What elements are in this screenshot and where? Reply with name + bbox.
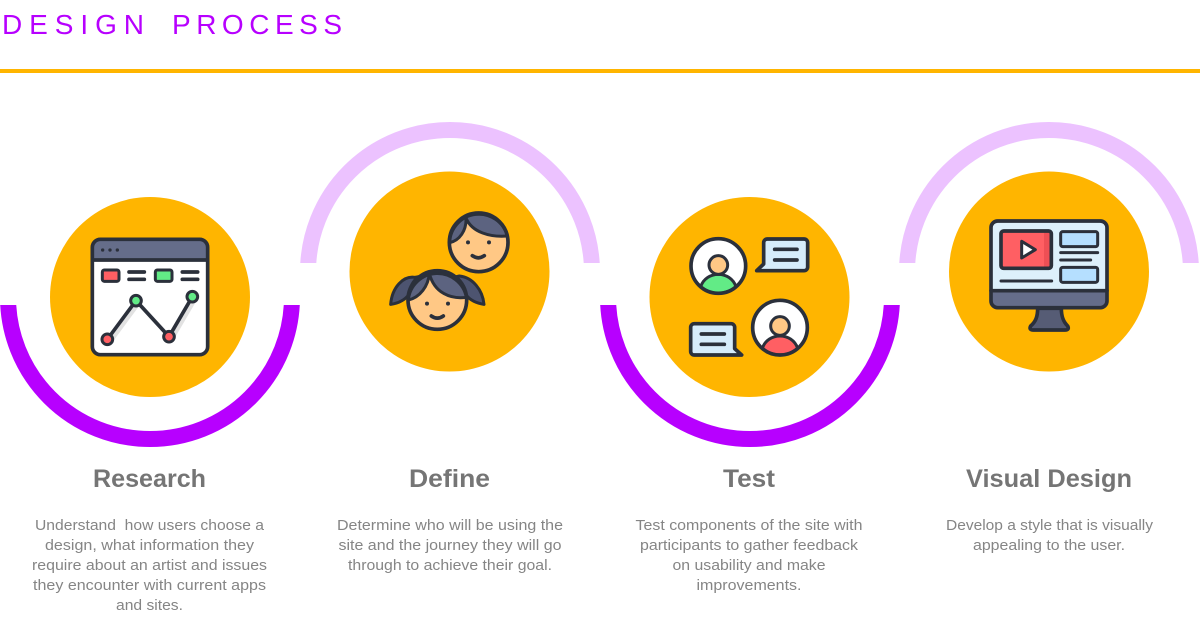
- text: define description: Determine who will be using the: [337, 517, 563, 534]
- text: define description: site and the journey they will go: [338, 537, 562, 554]
- text: test description: [636, 517, 862, 594]
- text: test description: on usability and make: [672, 557, 826, 574]
- text: test description: participants to gather feedback: [640, 537, 859, 554]
- title: [2, 9, 342, 40]
- orange circle: [650, 197, 850, 397]
- light purple top arc: [899, 122, 1199, 263]
- text: define description: [337, 517, 563, 574]
- orange circle: [949, 172, 1149, 372]
- text: test description: Test components of the site with: [636, 517, 862, 534]
- title: DESIGN: [2, 9, 144, 40]
- panel: research: [8, 155, 292, 614]
- text: visual design description: Develop a style that is visually: [946, 517, 1154, 534]
- text: visual design description: appealing to the user.: [973, 537, 1125, 554]
- text: research description: Understand how users choose a: [35, 517, 265, 534]
- heading: visual design: Visual Design: [966, 465, 1132, 493]
- icon: browser window with line chart: [92, 239, 208, 355]
- panel: define: [308, 130, 592, 574]
- icon: desktop monitor with video: [991, 221, 1107, 330]
- orange circle: [350, 172, 550, 372]
- title: PROCESS: [172, 9, 342, 40]
- text: research description: they encounter with current apps: [33, 577, 266, 594]
- purple bottom arc: [0, 305, 300, 447]
- text: define description: through to achieve their goal.: [348, 557, 552, 574]
- heading: research: Research: [93, 465, 206, 493]
- heading: define: Define: [409, 465, 490, 493]
- text: visual design description: [946, 517, 1154, 554]
- text: research description: [32, 517, 267, 614]
- text: test description: improvements.: [696, 577, 802, 594]
- light purple top arc: [300, 122, 600, 263]
- purple bottom arc: [600, 305, 900, 447]
- text: research description: design, what information they: [45, 537, 255, 554]
- icon: participants and speech bubbles: [691, 239, 808, 355]
- panel: visual design: [907, 130, 1191, 554]
- orange circle: [50, 197, 250, 397]
- text: research description: require about an artist and issues: [32, 557, 267, 574]
- icon: two children faces: [391, 213, 508, 329]
- heading: test: Test: [723, 465, 776, 493]
- text: research description: and sites.: [116, 597, 183, 614]
- panel: test: [608, 155, 892, 594]
